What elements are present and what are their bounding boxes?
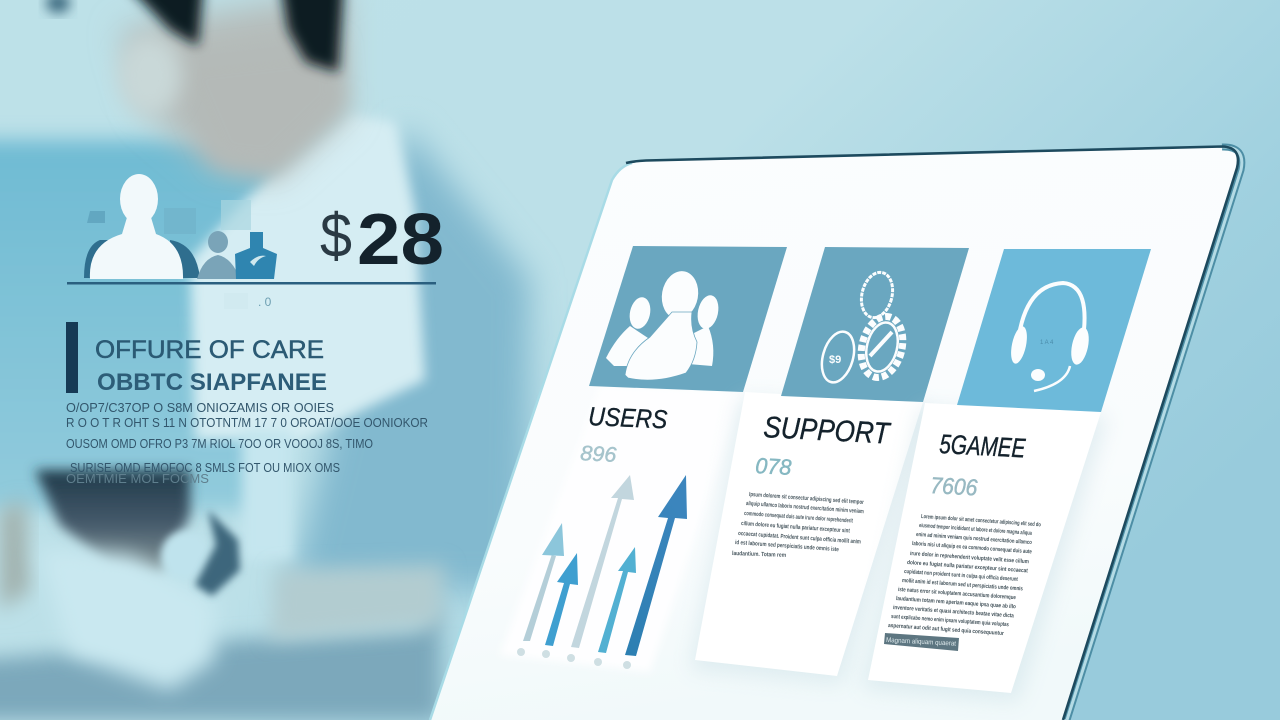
subheading: OBBTC SIAPFANEE [97, 369, 327, 396]
heading: support: SUPPORT [763, 411, 893, 451]
card: support [690, 247, 969, 684]
body text: O/OP7/C37OP O S8M ONIOZAMIS OR OOIES [66, 401, 334, 415]
icon tile: support: $9 [829, 354, 841, 366]
body text: service: mollit anim id est laborum sed ut perspiciatis unde omnis [902, 578, 1023, 592]
stat value [320, 200, 444, 280]
body text: support: Ipsum dolorem sit consectur adipiscing sed elit tempor [749, 492, 864, 506]
stat value: $ [320, 202, 352, 271]
stat value: 28 [357, 200, 444, 280]
chart: rising arrows [517, 475, 687, 669]
value: users: 896 [580, 442, 617, 467]
panel: stat header: . 0 [258, 295, 272, 309]
icon tile: users [589, 246, 787, 392]
footer bar: service [884, 633, 959, 651]
value: support: 078 [755, 453, 793, 480]
heading: OFFURE OF CARE [95, 336, 324, 364]
body text: service: Lorem ipsum dolor sit amet consectetur adipiscing elit sed do [921, 514, 1041, 528]
body text: service: dolore eu fugiat nulla pariatur excepteur sint occaecat [907, 560, 1028, 574]
body text: support: commodo consequat duis aute irure dolor reprehenderit [744, 511, 853, 525]
panel: tablet [430, 146, 1242, 720]
body text: OEMTMIE MOL FOCMS [66, 472, 209, 486]
body text: service: laboris nisi ut aliquip ex ea commodo consequat duis aute [912, 541, 1033, 555]
body text: service: irure dolor in reprehenderit voluptate velit esse cillum [910, 551, 1029, 565]
body text: support: occaecat cupidatat. Proident sunt culpa officia mollit anim [738, 531, 861, 546]
body text: SURISE OMD EMOFOC 8 SMLS FOT OU MIOX OMS [70, 461, 340, 475]
body text: support: laudantium. Totam rem [732, 551, 786, 559]
card: service [862, 249, 1151, 702]
text block: office of care [66, 322, 428, 486]
value: service: 7606 [930, 472, 978, 500]
body text: service: iste natus error sit voluptatem accusantium doloremque [898, 587, 1017, 601]
body text: support: aliquip ullamco laboris nostrud exercitation minim veniam [746, 501, 864, 515]
body text: service: laudantium totam rem aperiam eaque ipsa quae ab illo [896, 596, 1016, 610]
body text: service: inventore veritatis et quasi architecto beatae vitae dicta [893, 605, 1015, 619]
heading: service: 5GAMEE [939, 429, 1027, 464]
body text: OUSOM OMD OFRO P3 7M RIOL 7OO OR VOOOJ 8S, TIMO [66, 437, 373, 451]
body text: service: eiusmod tempor incididunt ut labore et dolore magna aliqua [919, 523, 1033, 537]
footer bar: service: Magnam aliquam quaerat [886, 637, 956, 648]
body text: service [888, 514, 1041, 637]
body text: support: id est laborum sed perspiciatis unde omnis iste [735, 540, 840, 553]
body text [66, 401, 428, 486]
icon: people group [84, 174, 277, 279]
panel: stat header [67, 174, 444, 309]
heading: users: USERS [588, 401, 669, 434]
icon tile: support [781, 247, 969, 402]
body text: service: enim ad minim veniam quis nostrud exercitation ullamco [916, 532, 1032, 546]
body text: service: cupidatat non proident sunt in culpa qui officia deserunt [904, 569, 1018, 583]
body text: support: cillum dolore eu fugiat nulla pariatur excepteur sint [741, 521, 850, 535]
body text: R O O T R OHT S 11 N OTOTNT/M 17 7 0 OROAT/OOE OONIOKOR [66, 416, 428, 430]
body text: service: sunt explicabo nemo enim ipsam voluptatem quia voluptas [891, 614, 1009, 628]
body text: support [732, 492, 864, 559]
icon tile: service [957, 249, 1151, 412]
body text: service: aspernatur aut odit aut fugit sed quia consequuntur [888, 623, 1005, 637]
icon tile: service: 1 A 4 [1040, 340, 1054, 346]
card: users [500, 246, 787, 672]
